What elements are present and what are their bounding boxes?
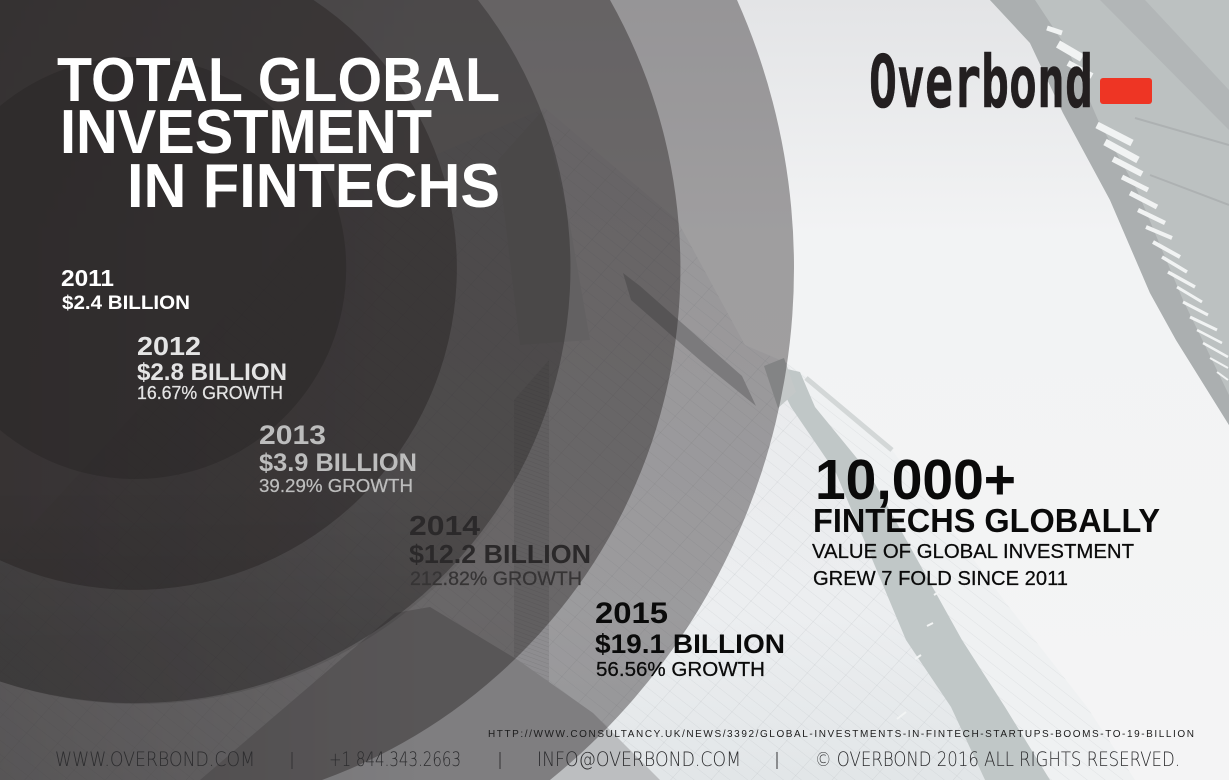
data 2014: 2014 bbox=[409, 510, 480, 541]
callout: 10,000+ fintechs: GREW 7 FOLD SINCE 2011 bbox=[813, 568, 1068, 590]
title: INVESTMENT bbox=[60, 98, 432, 167]
data 2014 bbox=[409, 510, 591, 590]
window stripes bbox=[1047, 28, 1228, 380]
data 2011: $2.4 BILLION bbox=[62, 293, 190, 314]
data 2012: $2.8 BILLION bbox=[137, 359, 287, 386]
circle 2015 bbox=[0, 0, 794, 780]
concentric circles bbox=[0, 0, 794, 780]
data 2013: 39.29% GROWTH bbox=[259, 475, 413, 496]
title: TOTAL GLOBAL bbox=[57, 46, 500, 115]
logo: Overbond: Overbond bbox=[869, 40, 1093, 124]
tower glass band bbox=[770, 365, 1050, 780]
footer contact line: +1 844.343.2663 bbox=[329, 748, 461, 771]
data 2012: 16.67% GROWTH bbox=[137, 383, 283, 403]
data 2014: 212.82% GROWTH bbox=[410, 569, 582, 590]
background: upper-right building bbox=[990, 0, 1229, 425]
lower ring shading bbox=[0, 480, 519, 704]
callout: 10,000+ fintechs: FINTECHS GLOBALLY bbox=[813, 502, 1160, 539]
left shading bbox=[0, 0, 420, 780]
footer contact line: INFO@OVERBOND.COM bbox=[537, 748, 741, 771]
background: central glass towers bbox=[0, 108, 1135, 780]
callout: 10,000+ fintechs: 10,000+ bbox=[815, 448, 1016, 512]
slanted facade strip bbox=[623, 273, 756, 406]
dark hatch column bbox=[514, 360, 549, 720]
data 2014: $12.2 BILLION bbox=[409, 541, 591, 569]
circle 2014 bbox=[0, 0, 680, 780]
circle 2011 bbox=[0, 57, 346, 479]
footer contact line bbox=[55, 748, 1180, 771]
data 2013 bbox=[259, 420, 417, 496]
title: IN FINTECHS bbox=[127, 152, 500, 221]
source url: HTTP://WWW.CONSULTANCY.UK/NEWS/3392/GLOBAL-INVESTMENTS-IN-FINTECH-STARTUPS-BOOMS-TO-19-BILLION bbox=[488, 729, 1194, 740]
data 2013: $3.9 BILLION bbox=[259, 449, 417, 477]
data 2015: $19.1 BILLION bbox=[595, 629, 785, 659]
callout: 10,000+ fintechs: VALUE OF GLOBAL INVESTMENT bbox=[812, 541, 1134, 563]
logo red block bbox=[1100, 78, 1152, 104]
data 2011 bbox=[61, 265, 190, 314]
data 2015 bbox=[595, 597, 785, 681]
callout: 10,000+ fintechs bbox=[812, 448, 1160, 590]
circle 2013 bbox=[0, 0, 570, 703]
data 2011: 2011 bbox=[61, 265, 114, 291]
title bbox=[57, 46, 500, 221]
circle 2012 bbox=[0, 0, 457, 590]
data 2013: 2013 bbox=[259, 420, 326, 450]
lower building roof bbox=[200, 607, 660, 780]
footer contact line: WWW.OVERBOND.COM bbox=[55, 748, 255, 771]
data 2015: 56.56% GROWTH bbox=[596, 659, 765, 681]
data 2015: 2015 bbox=[595, 597, 668, 630]
data 2012: 2012 bbox=[137, 331, 201, 361]
data 2012 bbox=[137, 331, 287, 403]
